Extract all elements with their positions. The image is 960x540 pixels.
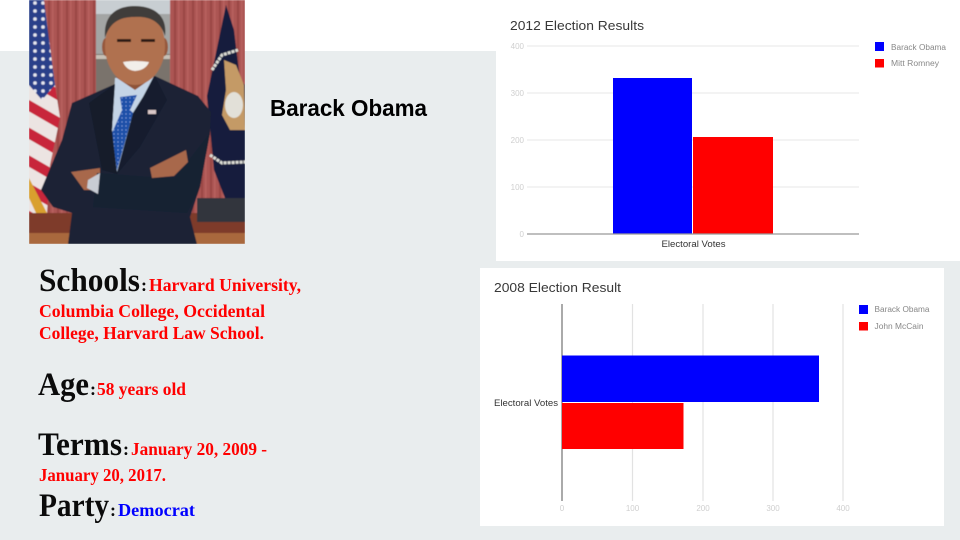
text block: terms: : <box>123 439 129 459</box>
photo sub-element: shirt and tie <box>112 74 155 172</box>
text block: schools: Harvard University, <box>149 275 301 295</box>
y axis labels: 2012 <box>511 42 525 239</box>
text block: age: : <box>90 379 96 399</box>
x axis labels: 2008: 200 <box>696 504 710 513</box>
bar: Barack Obama 2012 <box>613 78 692 234</box>
y axis labels: 2012: 400 <box>511 42 525 51</box>
x axis labels: 2008: 100 <box>626 504 640 513</box>
x axis label: 2012: Electoral Votes <box>662 239 726 249</box>
text block: age <box>38 367 186 403</box>
text block: party <box>39 488 195 524</box>
photo sub-element: suit <box>41 76 211 244</box>
chart title: 2012: 2012 Election Results <box>510 18 645 33</box>
legend: 2012: Barack Obama <box>891 43 947 52</box>
legend: 2008 <box>859 305 930 331</box>
panel: 2008 election bar chart <box>480 268 944 526</box>
bar: Barack Obama 2008 <box>562 356 819 402</box>
photo: portrait of Barack Obama <box>29 0 245 244</box>
y axis label: 2008: Electoral Votes <box>494 398 559 408</box>
bar: John McCain <box>562 403 684 449</box>
x axis labels: 2008 <box>560 504 850 513</box>
x axis labels: 2008: 400 <box>836 504 850 513</box>
text block: schools: Schools <box>39 263 140 299</box>
bar: Mitt Romney <box>693 137 773 234</box>
x axis labels: 2008: 0 <box>560 504 565 513</box>
text block: party: Party <box>39 488 109 524</box>
legend: 2012 <box>875 42 947 68</box>
text block: age: Age <box>38 367 89 403</box>
y axis labels: 2012: 0 <box>520 230 525 239</box>
y axis labels: 2012: 300 <box>511 89 525 98</box>
chart title: 2008: 2008 Election Result <box>494 280 621 295</box>
photo sub-element: face <box>105 6 165 85</box>
text block: terms <box>38 427 267 485</box>
photo sub-element: folded arms <box>70 134 210 194</box>
y axis labels: 2012: 100 <box>511 183 525 192</box>
text block: schools: College, Harvard Law School. <box>39 323 264 343</box>
text block: schools <box>39 263 301 343</box>
text block: party: : <box>110 500 116 520</box>
legend: 2008: Barack Obama <box>874 305 930 314</box>
text block: age: 58 years old <box>97 379 186 399</box>
x axis labels: 2008: 300 <box>766 504 780 513</box>
text block: schools: : <box>141 275 147 295</box>
text block: party: Democrat <box>118 500 195 520</box>
text block: schools: Columbia College, Occidental <box>39 301 265 321</box>
text block: terms: Terms <box>38 427 122 463</box>
legend: 2008: John McCain <box>874 322 924 331</box>
y axis labels: 2012: 200 <box>511 136 525 145</box>
panel: 2012 election column chart <box>496 0 960 261</box>
text block: terms: January 20, 2009 - <box>131 439 267 459</box>
heading: name: Barack Obama <box>270 95 427 121</box>
text block: terms: January 20, 2017. <box>39 465 166 485</box>
legend: 2012: Mitt Romney <box>891 59 939 68</box>
